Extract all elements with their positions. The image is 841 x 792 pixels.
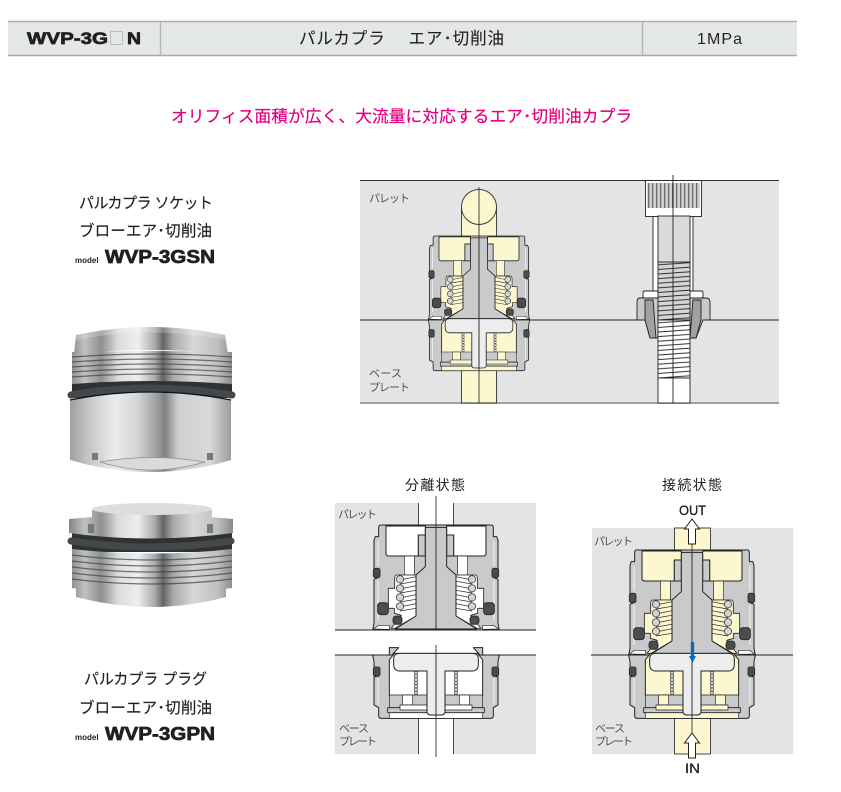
plug section bbox=[373, 648, 499, 718]
base plate label: プレート bbox=[369, 381, 410, 394]
arrow: in bbox=[684, 733, 700, 758]
tagline: オリフィス面積が広く、大流量に対応するエア･切削油カプラ bbox=[171, 107, 632, 126]
model code: WVP-3G bbox=[27, 29, 108, 48]
socket section bbox=[373, 525, 499, 630]
caption: separated: 分離状態 bbox=[405, 477, 465, 493]
model code: N bbox=[127, 29, 141, 48]
base plate label bbox=[369, 368, 410, 394]
socket label: ブローエア･切削油 bbox=[79, 221, 212, 240]
bolt section bbox=[637, 175, 710, 403]
coupler section bbox=[629, 550, 755, 718]
plug label: ブローエア･切削油 bbox=[79, 698, 212, 717]
panel: separated state bbox=[335, 496, 536, 757]
base plate label: ベース bbox=[595, 723, 625, 735]
base plate label bbox=[595, 723, 633, 748]
plug label bbox=[75, 671, 215, 744]
air passage bbox=[462, 190, 496, 403]
label: OUT: OUT bbox=[679, 502, 706, 518]
base plate label: ベース bbox=[369, 368, 402, 380]
plug label: model bbox=[75, 733, 99, 742]
base plate label bbox=[339, 723, 377, 748]
model code bbox=[27, 25, 141, 49]
socket label bbox=[75, 195, 215, 267]
panel: connected state bbox=[591, 502, 793, 776]
photo: plug bbox=[69, 503, 233, 607]
arrow: flow direction bbox=[689, 642, 696, 663]
base plate label: ベース bbox=[339, 723, 369, 735]
header bar bbox=[8, 22, 797, 56]
base plate label: プレート bbox=[595, 735, 633, 748]
plug label: パルカプラ プラグ bbox=[84, 671, 207, 688]
caption: connected: 接続状態 bbox=[662, 477, 722, 493]
pallet label: パレット bbox=[369, 192, 410, 205]
product name: パルカプラ エア･切削油 bbox=[299, 29, 504, 48]
photo: socket bbox=[70, 327, 232, 472]
coupler section bbox=[428, 236, 530, 371]
label: IN: IN bbox=[685, 760, 700, 776]
pallet label: パレット bbox=[594, 535, 633, 548]
pressure: 1MPa bbox=[697, 31, 742, 48]
pallet label: パレット bbox=[338, 508, 377, 521]
base plate label: プレート bbox=[339, 735, 377, 748]
panel: mounting cross-section bbox=[360, 175, 779, 404]
plug label: WVP-3GPN bbox=[105, 724, 215, 744]
arrow: out bbox=[684, 519, 700, 544]
mid line bbox=[360, 319, 779, 321]
socket label: パルカプラ ソケット bbox=[79, 195, 213, 212]
socket label: WVP-3GSN bbox=[105, 247, 215, 267]
model code: □ bbox=[108, 25, 125, 49]
socket label: model bbox=[75, 256, 99, 265]
